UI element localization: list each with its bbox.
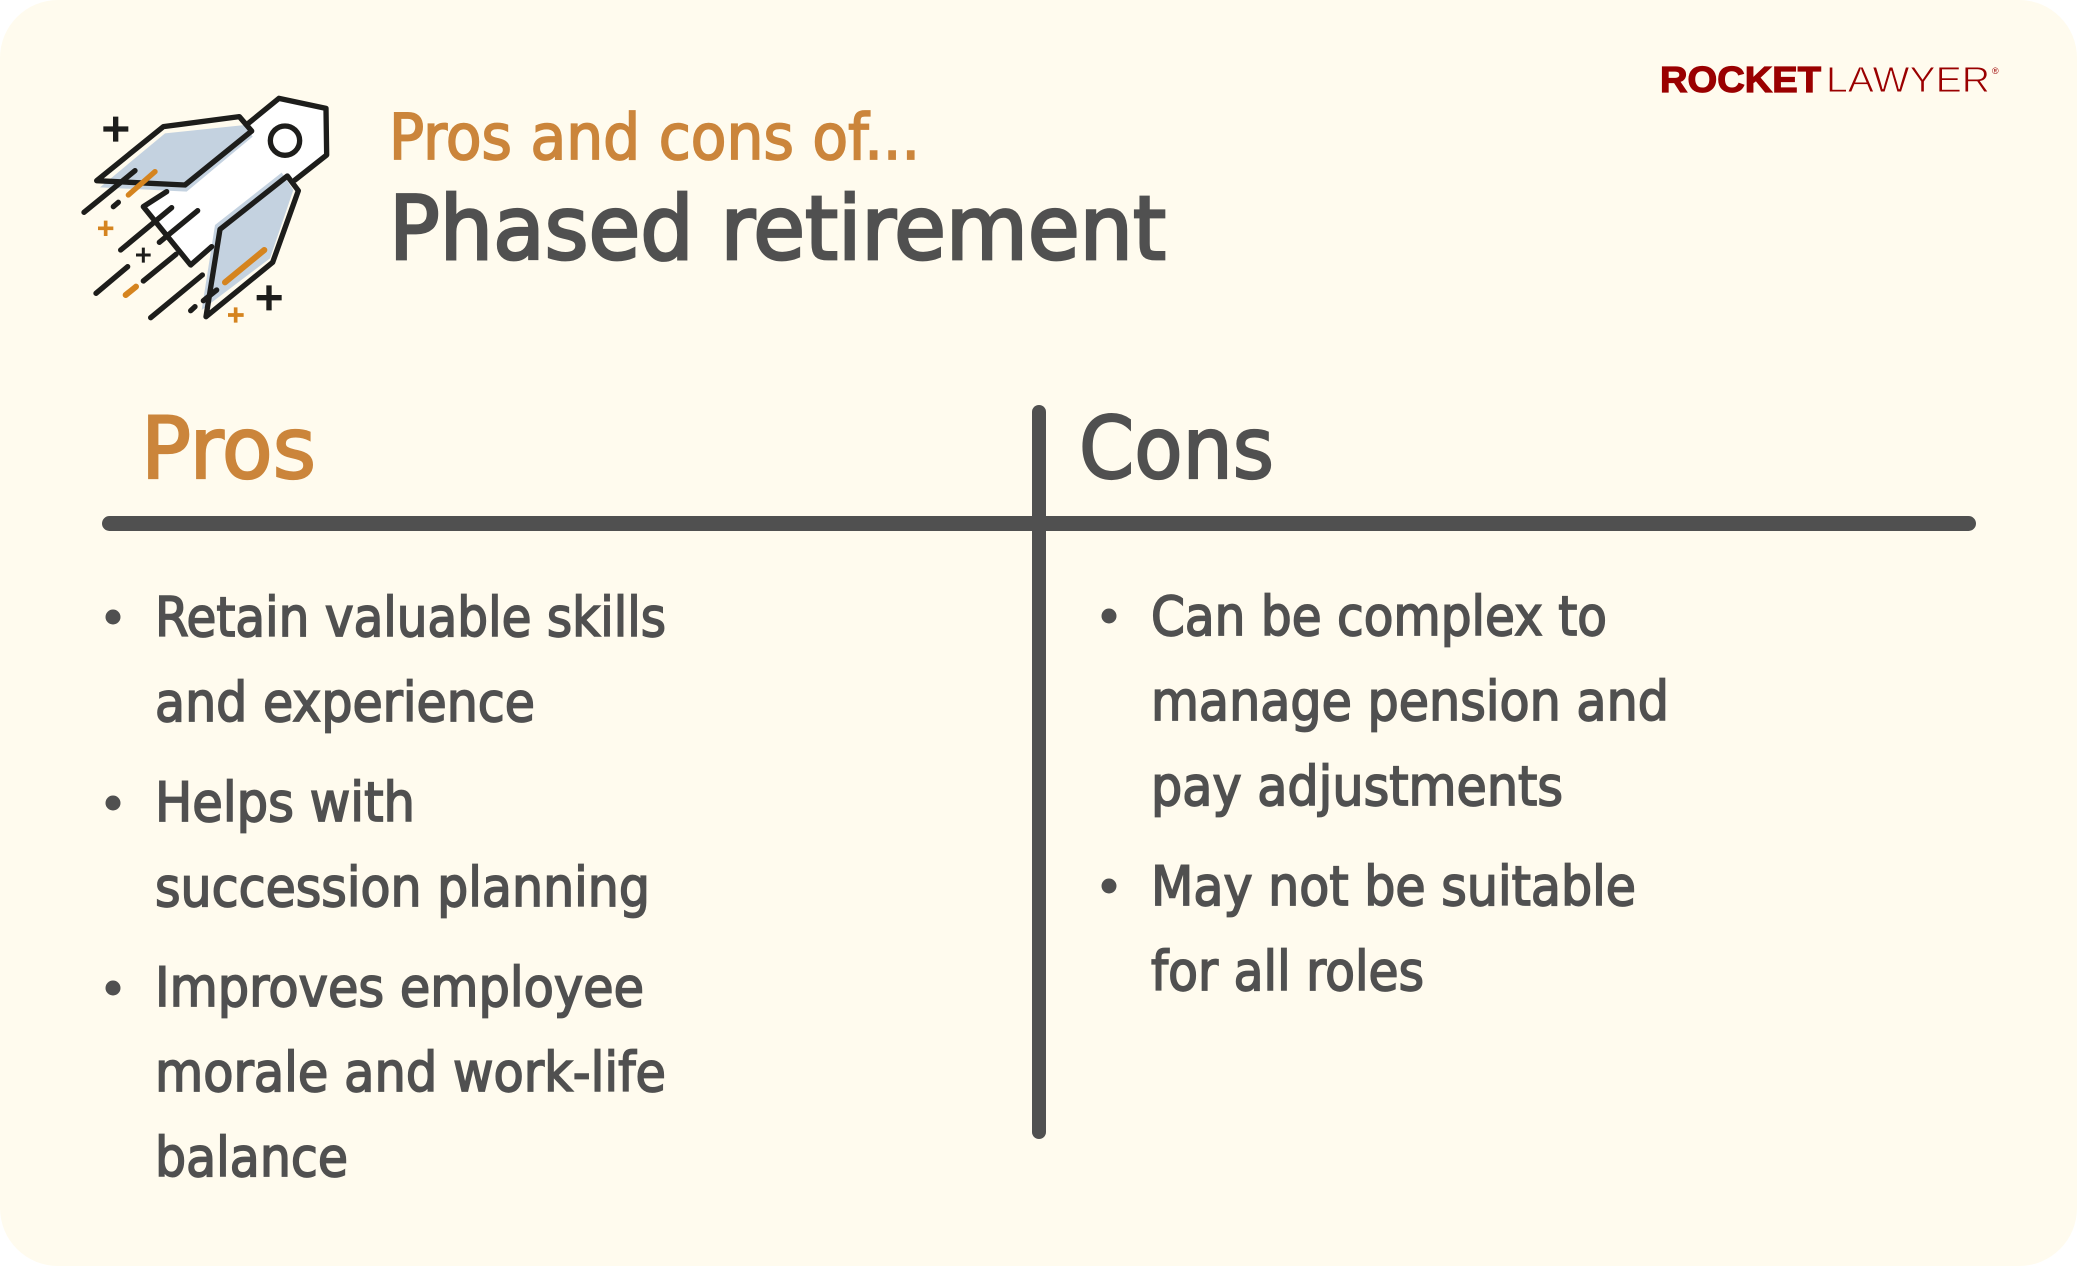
list: pros: succession planning [155,856,650,919]
list: pros: and experience [155,671,535,734]
list: cons: May not be suitable [1151,855,1636,918]
list: pros: Improves employee [155,956,644,1019]
logo: Rocket Lawyer: ROCKET [1660,59,1821,100]
list: pros: morale and work-life [155,1041,666,1104]
title: Phased retirement [389,177,1166,280]
icon: rocket [84,98,327,323]
logo: Rocket Lawyer [1660,59,1999,100]
list: cons: pay adjustments [1151,755,1563,818]
heading: Cons: Cons [1079,399,1274,499]
heading: Pros: Pros [141,399,316,499]
table dividers [102,405,1976,1139]
list: cons [1102,585,1669,1003]
list: cons: manage pension and [1151,670,1669,733]
list: pros: balance [155,1126,348,1189]
list: cons: for all roles [1151,940,1424,1003]
logo: Rocket Lawyer: ® [1992,66,1999,76]
subtitle: Pros and cons of... [389,101,920,174]
list: cons: Can be complex to [1151,585,1607,648]
list: pros: Retain valuable skills [155,586,666,649]
list: pros [106,586,666,1189]
list: pros: Helps with [155,771,415,834]
logo: Rocket Lawyer: LAWYER [1826,59,1990,100]
